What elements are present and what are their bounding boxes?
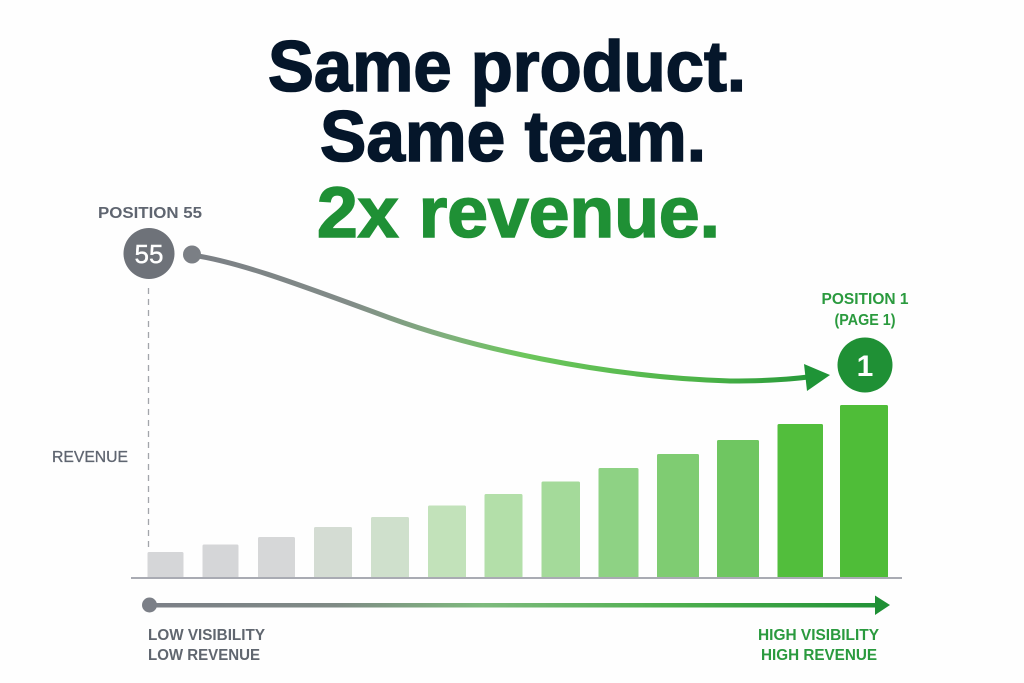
label: position 1 page 1 [822,291,909,329]
label: high visibility high revenue: HIGH REVENUE [761,647,877,664]
label: position 1 page 1: (PAGE 1) [834,312,896,329]
bar chart: revenue rising with visibility [148,405,888,578]
title [268,28,746,253]
marker: position 55 circle [124,228,174,279]
label: revenue: REVENUE [52,449,128,466]
label: low visibility low revenue: LOW VISIBILITY [148,627,265,644]
label: high visibility high revenue [758,627,879,664]
marker: position 1 circle: 1 [857,350,873,383]
curved arrow: position 55 to position 1 [183,246,830,391]
title line 1: Same product. [268,28,746,107]
marker: position 55 circle: 55 [135,239,163,269]
label: low visibility low revenue [148,627,265,664]
label: low visibility low revenue: LOW REVENUE [148,647,260,664]
chart baseline [131,577,902,579]
title line 2: Same team. [320,98,706,177]
visibility axis arrow [142,596,890,615]
label: position 55: POSITION 55 [98,205,202,222]
marker: position 1 circle [838,338,892,392]
dashed guide line [148,288,150,552]
label: position 1 page 1: POSITION 1 [822,291,909,308]
title line 3: 2x revenue. [317,174,720,253]
label: high visibility high revenue: HIGH VISIBILITY [758,627,879,644]
